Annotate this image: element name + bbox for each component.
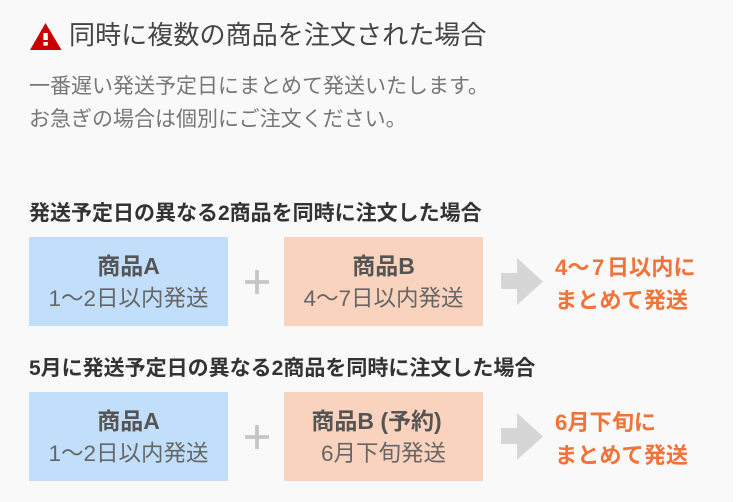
- panel: case 1 product B: 商品B: [352, 253, 415, 279]
- result text 2: 6月下旬に: [555, 410, 656, 435]
- panel: case 1 product B: [284, 237, 483, 326]
- result text 2: [555, 410, 688, 468]
- intro text: お急ぎの場合は個別にご注文ください。: [29, 108, 407, 131]
- result text 2: まとめて発送: [555, 443, 688, 468]
- panel: case 2 product B: 6月下旬発送: [321, 441, 446, 466]
- intro text: 一番遅い発送予定日にまとめて発送いたします。: [29, 75, 489, 98]
- icon: plus 1: [245, 270, 269, 294]
- intro text: [29, 75, 489, 131]
- arrow 1: [501, 258, 543, 305]
- panel: case 2 product B: 商品B (予約): [311, 408, 442, 434]
- subheading: case 2: 5月に発送予定日の異なる2商品を同時に注文した場合: [29, 357, 535, 380]
- subheading: case 1: 発送予定日の異なる2商品を同時に注文した場合: [29, 202, 482, 225]
- panel: case 1 product A: 1～2日以内発送: [48, 286, 209, 311]
- panel: case 1 product A: 商品A: [97, 253, 160, 279]
- panel: case 1 product B: 4～7日以内発送: [303, 286, 464, 311]
- icon: warning triangle: [30, 23, 62, 50]
- panel: case 2 product A: 1～2日以内発送: [48, 441, 209, 466]
- result text 1: 4～7日以内に: [555, 255, 696, 280]
- result text 1: まとめて発送: [555, 288, 688, 313]
- panel: case 2 product B: [284, 392, 483, 481]
- heading: 同時に複数の商品を注文された場合: [69, 20, 486, 50]
- panel: case 2 product A: [29, 392, 228, 481]
- panel: case 2 product A: 商品A: [97, 408, 160, 434]
- panel: case 1 product A: [29, 237, 228, 326]
- result text 1: [555, 255, 696, 313]
- arrow 2: [501, 413, 543, 460]
- icon: plus 2: [245, 425, 269, 449]
